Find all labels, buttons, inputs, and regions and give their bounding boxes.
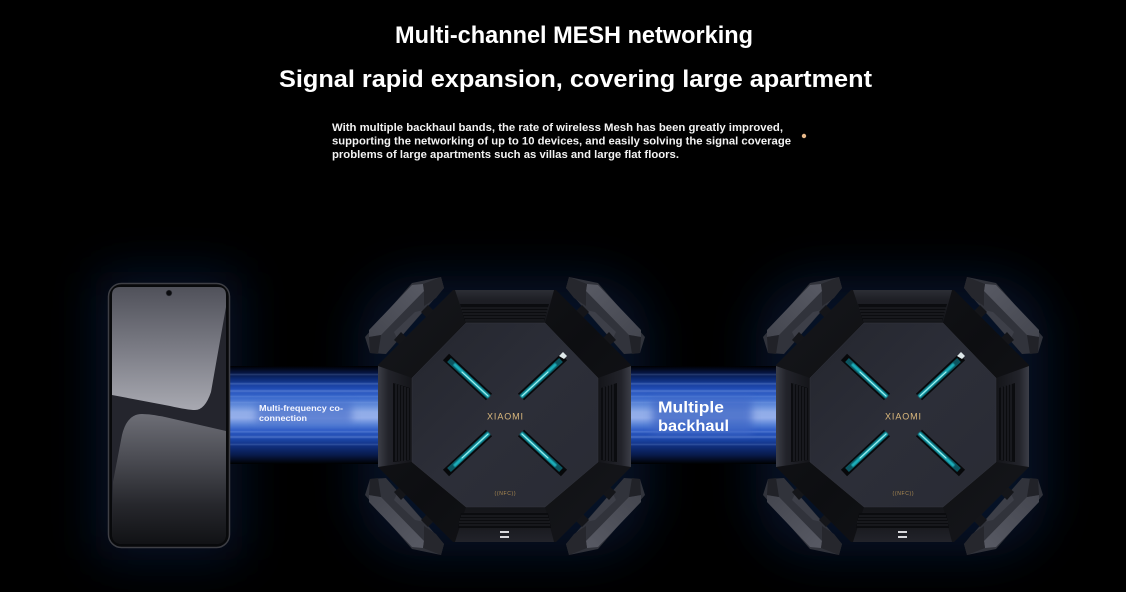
description: supporting the networking of up to 10 devices, and easily solving the signal coverage <box>332 136 791 148</box>
router 1 NFC mark: ((NFC)) <box>494 491 516 497</box>
label: multiple backhaul: Multiple <box>658 400 724 416</box>
lower wallpaper shape <box>112 414 226 544</box>
router 2 logo: XIAOMI <box>885 412 921 422</box>
router 1 logo: XIAOMI <box>487 412 523 422</box>
title <box>279 22 872 93</box>
phone frame <box>108 284 230 548</box>
router 2 NFC mark: ((NFC)) <box>892 491 914 497</box>
title: Multi-channel MESH networking <box>395 22 753 49</box>
label: multi-frequency: connection <box>259 413 307 423</box>
beam: phone to first router <box>229 366 381 464</box>
title: Signal rapid expansion, covering large apartment <box>279 66 872 93</box>
label: multi-frequency <box>259 403 343 423</box>
phone screen <box>112 287 226 544</box>
decorative spark <box>802 134 806 138</box>
blue ambient glow <box>96 272 1048 560</box>
label: multiple backhaul <box>658 400 729 435</box>
description <box>332 122 791 161</box>
description: With multiple backhaul bands, the rate of wireless Mesh has been greatly improved, <box>332 122 783 134</box>
camera <box>166 290 172 296</box>
phone <box>108 284 230 548</box>
label: multiple backhaul: backhaul <box>658 418 729 435</box>
upper wallpaper shape <box>112 287 226 410</box>
beam: first router to second router <box>628 366 780 464</box>
router 1 <box>365 277 645 555</box>
description: problems of large apartments such as villas and large flat floors. <box>332 149 679 161</box>
router 2 <box>763 277 1043 555</box>
label: multi-frequency: Multi-frequency co- <box>259 403 343 413</box>
